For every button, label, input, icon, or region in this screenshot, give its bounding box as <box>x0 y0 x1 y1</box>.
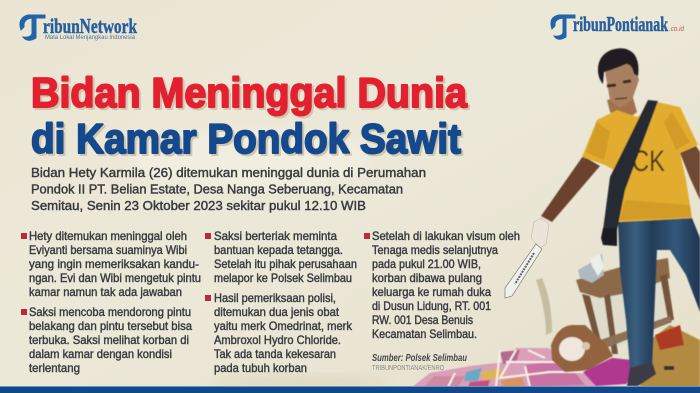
shoe <box>627 362 656 386</box>
bullet: Hety ditemukan: Hety ditemukan meninggal oleh <box>29 229 187 243</box>
intro paragraph: Bidan Hety Karmila (26) ditemukan meninggal dunia di Perumahan <box>31 166 426 180</box>
logo: Tribun Network: ribunNetwork <box>43 14 137 38</box>
column 3 bullet: pada pukul 21.00 WIB, <box>372 257 481 271</box>
column 3 bullet: RW. 001 Desa Benuis <box>372 313 473 327</box>
bullet: Saksi berteriak <box>205 229 357 285</box>
jeans <box>618 218 700 368</box>
logo: Tribun Pontianak <box>551 12 685 39</box>
illustration: standing man <box>541 48 700 386</box>
intro paragraph: Semitau, Senin 23 Oktober 2023 sekitar pukul 12.10 WIB <box>31 199 366 213</box>
bullet: Hasil pemeriksaan: Tak ada tanda kekesaran <box>214 347 336 361</box>
bullet: Hasil pemeriksaan: Hasil pemeriksaan polisi, <box>214 291 336 305</box>
bullet: Hety ditemukan: yang ingin memeriksakan kandu- <box>29 257 199 271</box>
title: Bidan Meninggal Dunia <box>33 71 470 118</box>
source credit: TRIBUNPONTIANAK/ENRO <box>372 365 444 372</box>
title <box>31 69 470 164</box>
bullet: Saksi berteriak: bantuan kepada tetangga. <box>214 243 343 257</box>
bullet: Hety ditemukan: Eviyanti bersama suaminya Wibi <box>29 243 187 257</box>
bullet: Hasil pemeriksaan: Ambroxol Hydro Chloride. <box>214 333 341 347</box>
title: di Kamar Pondok Sawit <box>33 117 463 164</box>
left arm <box>541 156 600 222</box>
bag <box>601 228 617 246</box>
bullet: Saksi mencoba: terlentang <box>29 361 80 375</box>
column 3 bullet: keluarga ke rumah duka <box>372 285 491 299</box>
bullet: Saksi mencoba: Saksi mencoba mendorong pintu <box>29 305 191 319</box>
source credit <box>372 353 467 372</box>
logo: Tribun Pontianak: .co.id <box>669 26 685 33</box>
bullet: Saksi mencoba: terbuka. Saksi melihat korban di <box>29 333 189 347</box>
title: Bidan Meninggal Dunia <box>31 69 468 116</box>
source credit: Sumber: Polsek Selimbau <box>372 353 467 364</box>
logo: Tribun Network: Mata Lokal Menjangkau Indonesia <box>45 34 135 41</box>
column 2 bullets <box>205 229 357 375</box>
bullet: Hasil pemeriksaan: yaitu merk Omedrinat, merk <box>214 319 352 333</box>
column 3 bullet: Setelah di lakukan visum oleh <box>372 229 520 243</box>
column 3 bullet: Tenaga medis selanjutnya <box>372 243 498 257</box>
bullet: Hety ditemukan <box>21 229 201 299</box>
shirt <box>582 102 698 222</box>
neck and head <box>607 94 637 122</box>
shirt logo: CK <box>632 145 665 178</box>
illustration: blanket <box>412 348 600 387</box>
bullet: Saksi mencoba: dalam kamar dengan kondisi <box>29 347 172 361</box>
bullet: Hasil pemeriksaan <box>205 291 352 375</box>
bullet: Saksi mencoba <box>21 305 192 375</box>
intro paragraph: Pondok II PT. Belian Estate, Desa Nanga Seberuang, Kecamatan <box>31 182 403 196</box>
column 3 bullet <box>364 229 520 341</box>
illustration: floor and blood <box>640 325 700 387</box>
bullet: Hasil pemeriksaan: ditemukan dua jenis obat <box>214 305 340 319</box>
intro paragraph <box>31 166 426 213</box>
title: di Kamar Pondok Sawit <box>31 115 461 162</box>
bullet: Hety ditemukan: kamar namun tak ada jawaban <box>29 285 182 299</box>
column 3 bullet: Kecamatan Selimbau. <box>372 327 477 341</box>
illustration: iron on table <box>578 254 604 283</box>
bag strap <box>603 100 658 230</box>
illustration: victim under pillow <box>551 325 636 386</box>
bullet: Saksi berteriak: Saksi berteriak meminta <box>214 229 337 243</box>
bullet: Saksi berteriak: Setelah itu pihak perusahaan <box>214 257 357 271</box>
column 3 bullet: korban dibawa pulang <box>372 271 482 285</box>
right arm <box>680 146 700 200</box>
column 3 bullet: di Dusun Lidung, RT. 001 <box>372 299 491 313</box>
bullet: Hety ditemukan: ngan. Evi dan Wibi mengetuk pintu <box>29 271 201 285</box>
column 1 bullets <box>21 229 201 375</box>
bullet: Saksi berteriak: melapor ke Polsek Selimbau <box>214 271 352 285</box>
illustration: glove and knife pointer <box>505 218 549 298</box>
bullet: Saksi mencoba: belakang dan pintu tersebut bisa <box>29 319 192 333</box>
bottom bar <box>0 386 700 393</box>
illustration: side table <box>576 258 674 354</box>
logo: Tribun Network <box>20 14 137 41</box>
bullet: Hasil pemeriksaan: pada tubuh korban <box>214 361 307 375</box>
